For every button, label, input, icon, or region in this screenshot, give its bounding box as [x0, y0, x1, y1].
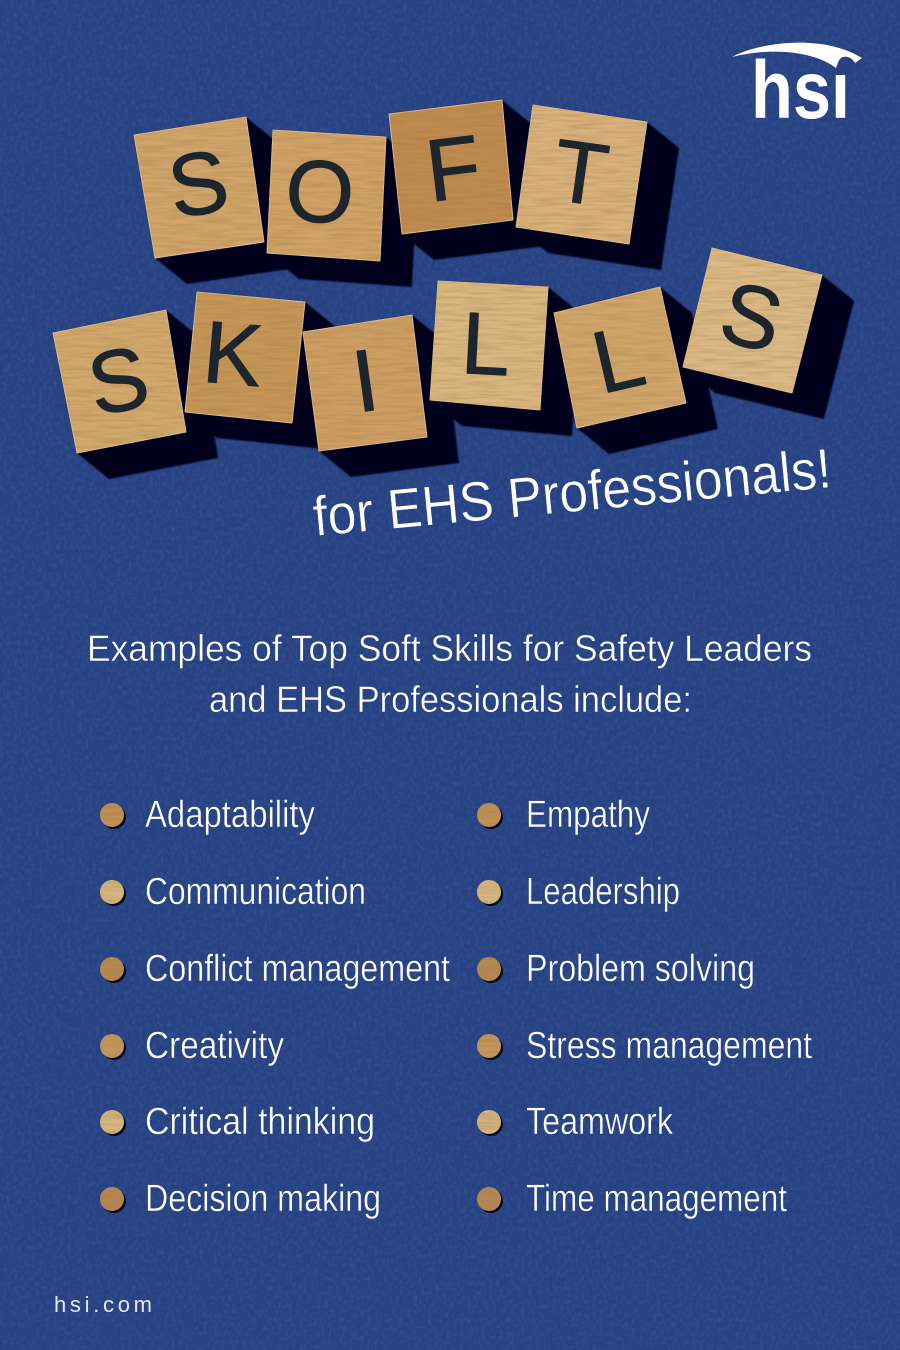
- skills list: left column: [100, 794, 450, 1220]
- item: Time management: Time management: [526, 1178, 787, 1220]
- item: Teamwork: [477, 1101, 674, 1143]
- tile F: F: [420, 116, 486, 221]
- item: Leadership: Leadership: [526, 871, 680, 913]
- tile I: I: [346, 330, 384, 431]
- item: Problem solving: Problem solving: [526, 948, 755, 990]
- item: Leadership: [477, 871, 680, 913]
- item: Decision making: Decision making: [145, 1178, 381, 1220]
- tile K: [185, 292, 305, 423]
- intro text: and EHS Professionals include:: [209, 679, 692, 720]
- tile S: S: [711, 261, 792, 372]
- tile S: [53, 310, 186, 453]
- item: Teamwork: Teamwork: [526, 1101, 674, 1143]
- tile F: [389, 100, 513, 234]
- tile L: [430, 281, 548, 410]
- logo: hsi: hsi: [751, 45, 850, 136]
- item: Critical thinking: Critical thinking: [145, 1101, 375, 1143]
- tile O: [267, 130, 386, 261]
- tile O: O: [283, 140, 357, 243]
- tile L: L: [583, 305, 653, 413]
- item: Conflict management: Conflict management: [145, 948, 450, 990]
- item: Creativity: Creativity: [145, 1025, 284, 1067]
- item: Empathy: Empathy: [526, 794, 650, 836]
- item: Stress management: Stress management: [526, 1025, 812, 1067]
- item: Adaptability: Adaptability: [145, 794, 315, 836]
- item: Empathy: [477, 794, 650, 836]
- intro text: Examples of Top Soft Skills for Safety Leaders: [87, 628, 812, 669]
- intro text: [87, 628, 812, 720]
- tile S: [134, 117, 264, 258]
- skills list: right column: [477, 794, 812, 1220]
- item: Communication: Communication: [145, 871, 366, 913]
- tile S: S: [80, 326, 157, 435]
- tile I: [303, 315, 427, 451]
- tile shadows: [53, 100, 854, 479]
- item: Creativity: [100, 1025, 284, 1067]
- subtitle: for EHS Professionals!: [310, 436, 834, 548]
- tile T: T: [547, 120, 614, 225]
- tile T: [516, 105, 647, 244]
- tile S: S: [162, 130, 235, 237]
- tile L: [554, 287, 686, 428]
- tile K: K: [199, 302, 266, 405]
- tile L: L: [459, 293, 513, 394]
- tile S: [683, 248, 822, 393]
- title tiles: SOFT: [134, 100, 647, 261]
- title tiles: SKILLS: [53, 248, 822, 453]
- footer url: hsi.com: [54, 1292, 156, 1317]
